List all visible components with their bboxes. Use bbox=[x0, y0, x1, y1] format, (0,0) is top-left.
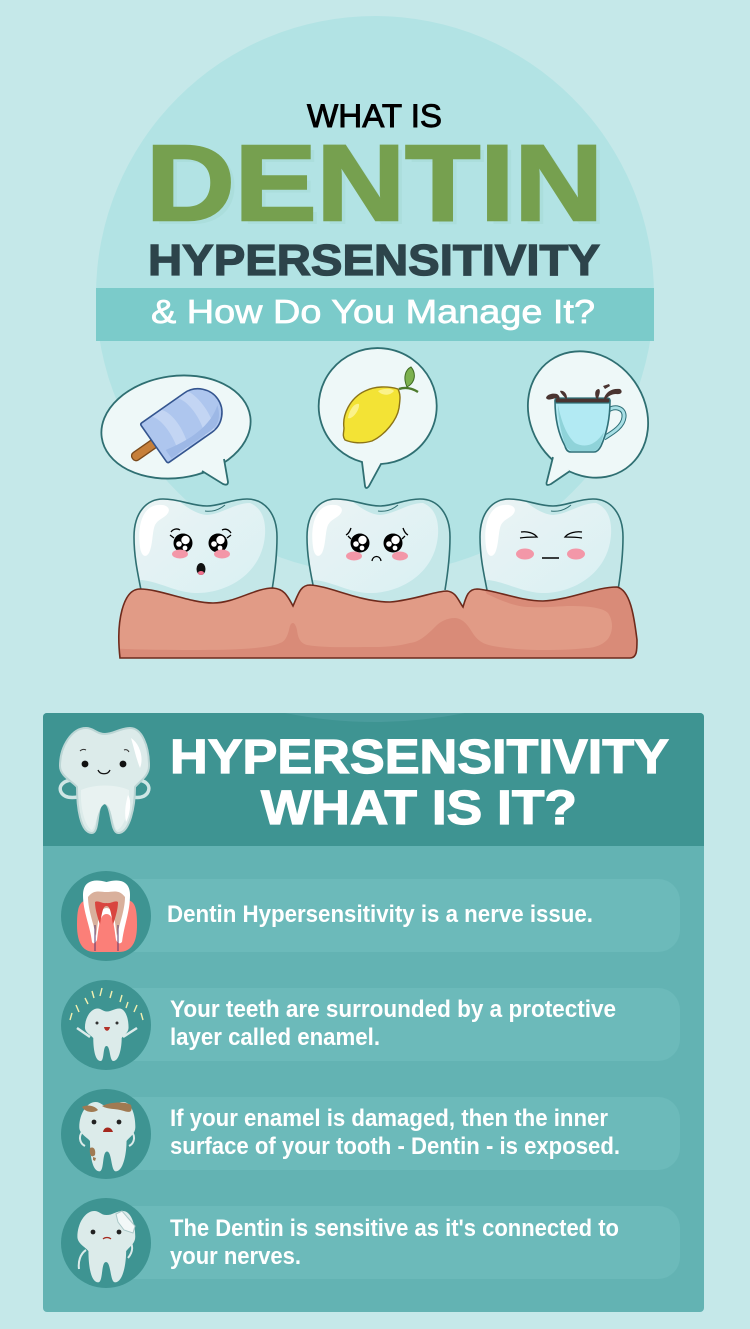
icon: happy tooth with sparkles bbox=[61, 980, 151, 1070]
subtitle band bbox=[96, 288, 654, 341]
heading: WHAT IS IT? bbox=[261, 782, 577, 835]
face: surprised bbox=[170, 529, 231, 575]
speech bubble: coffee cup bbox=[503, 328, 673, 501]
text bbox=[170, 1215, 619, 1270]
title: DENTIN bbox=[146, 122, 603, 243]
text: your nerves. bbox=[170, 1243, 301, 1270]
text bbox=[170, 996, 616, 1051]
row 3 bbox=[61, 1089, 680, 1179]
subtitle band: & How Do You Manage It? bbox=[151, 293, 595, 330]
speech bubble: lemon bbox=[319, 348, 437, 488]
text: surface of your tooth - Dentin - is exposed. bbox=[170, 1133, 620, 1160]
gums bbox=[105, 580, 637, 658]
row 1 bbox=[61, 871, 680, 961]
panel: what is it bbox=[43, 713, 704, 1312]
text: Your teeth are surrounded by a protective bbox=[170, 996, 616, 1023]
text bbox=[170, 1105, 620, 1160]
icon: smiling tooth bbox=[60, 728, 149, 833]
title: HYPERSENSITIVITY bbox=[148, 236, 600, 285]
icon: chipped tooth bbox=[61, 1198, 151, 1288]
heading bbox=[170, 731, 669, 835]
title bbox=[146, 98, 608, 285]
tooth: wincing bbox=[471, 490, 623, 606]
panel header bbox=[43, 713, 704, 846]
icon: lemon bbox=[343, 367, 418, 443]
speech bubble: popsicle bbox=[95, 366, 257, 488]
heading: HYPERSENSITIVITY bbox=[170, 731, 669, 784]
icon: popsicle bbox=[119, 379, 232, 478]
title: DENTIN bbox=[151, 126, 608, 247]
tooth: worried bbox=[298, 490, 450, 606]
title: WHAT IS bbox=[307, 98, 442, 134]
face: worried bbox=[346, 528, 408, 561]
text: layer called enamel. bbox=[170, 1024, 380, 1051]
text: Dentin Hypersensitivity is a nerve issue. bbox=[167, 901, 593, 928]
tooth: surprised bbox=[125, 490, 277, 606]
background circle bbox=[96, 16, 654, 574]
icon: stained tooth bbox=[61, 1089, 151, 1179]
text: The Dentin is sensitive as it's connected to bbox=[170, 1215, 619, 1242]
text: If your enamel is damaged, then the inner bbox=[170, 1105, 608, 1132]
icon: tooth cross-section bbox=[61, 871, 151, 961]
face: wincing bbox=[516, 532, 585, 560]
icon: coffee cup bbox=[546, 384, 624, 452]
row 2 bbox=[61, 980, 680, 1070]
row 4 bbox=[61, 1198, 680, 1288]
